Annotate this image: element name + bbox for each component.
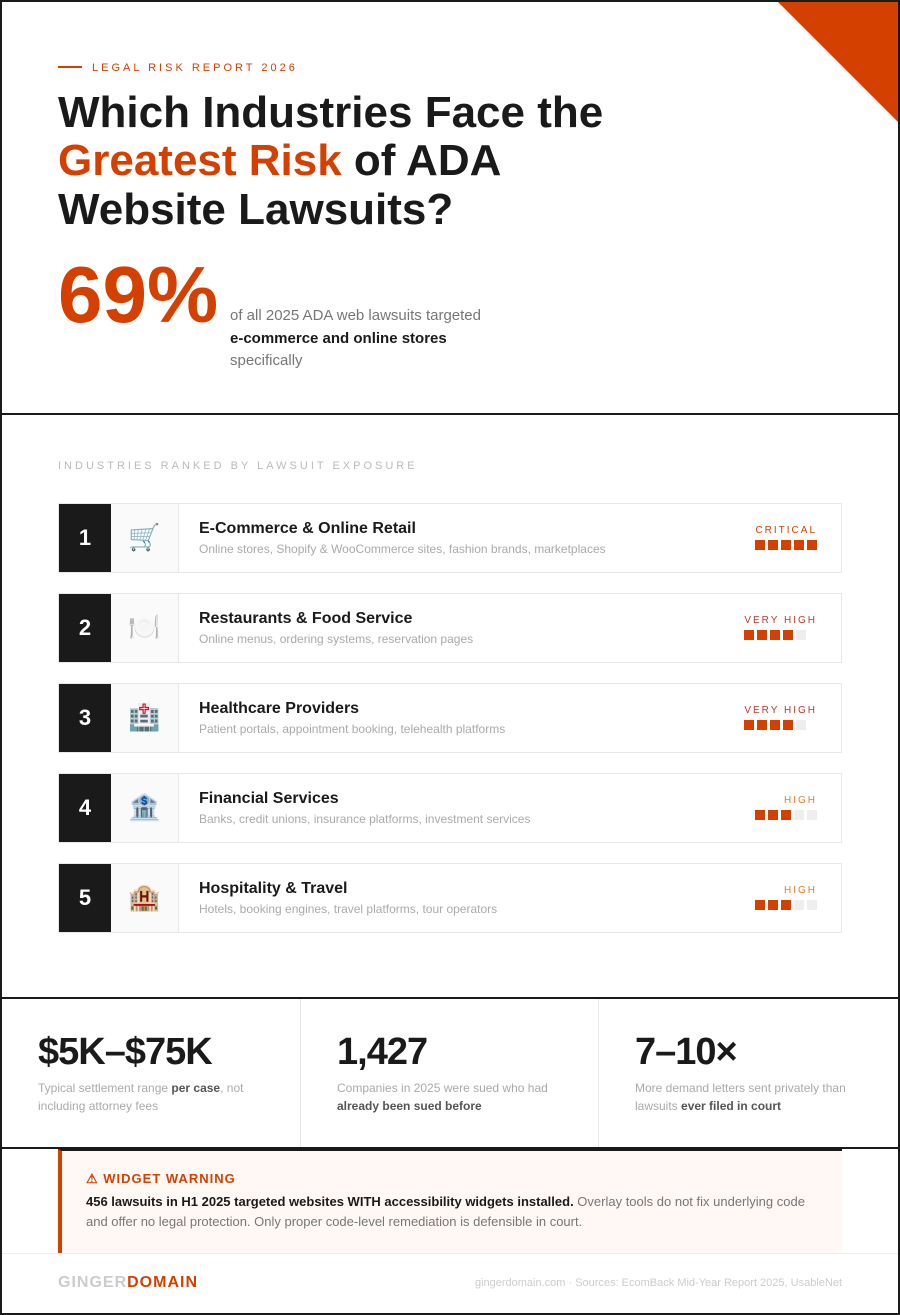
rank: [59, 774, 111, 842]
icon: hospital: 🏥: [128, 703, 161, 733]
description: Hotels, booking engines, travel platforms, tour operators: [199, 902, 497, 916]
icon: hotel: 🏨: [128, 883, 161, 913]
stat 3 text: More demand letters sent privately than: [635, 1081, 846, 1095]
row 5: [58, 863, 842, 933]
risk meter: HIGH: [784, 795, 817, 806]
stat 1 text: including attorney fees: [38, 1099, 158, 1113]
title: Website Lawsuits?: [58, 185, 453, 234]
big stat 69%: 69%: [58, 250, 218, 339]
risk meter: VERY HIGH: [744, 705, 817, 716]
row 1: [58, 503, 842, 573]
rank: [59, 504, 111, 572]
risk meter: HIGH: [784, 885, 817, 896]
risk meter: [755, 525, 817, 550]
stat description: e-commerce and online stores: [230, 330, 447, 346]
section heading: INDUSTRIES RANKED BY LAWSUIT EXPOSURE: [58, 460, 418, 472]
name: Restaurants & Food Service: [199, 610, 412, 627]
stat 3 text: lawsuits ever filed in court: [635, 1099, 781, 1113]
risk meter: [755, 885, 817, 910]
risk meter: [744, 705, 817, 730]
warning callout: [58, 1149, 842, 1253]
stat 2 value: 1,427: [337, 1031, 427, 1073]
description: Online menus, ordering systems, reservation pages: [199, 632, 473, 646]
name: Hospitality & Travel: [199, 880, 348, 897]
risk meter: CRITICAL: [755, 525, 817, 536]
rank: [59, 864, 111, 932]
stat description: [230, 307, 481, 369]
title: Which Industries Face the: [58, 88, 603, 137]
stat 3 value: 7–10×: [635, 1031, 737, 1073]
risk meter: [755, 795, 817, 820]
row 2: [58, 593, 842, 663]
warning body: [86, 1194, 805, 1229]
icon: hotel: [111, 864, 179, 932]
row 3: [58, 683, 842, 753]
icon: plate: [111, 594, 179, 662]
rank: 5: [79, 885, 91, 910]
stat 1 text: Typical settlement range per case, not: [38, 1081, 243, 1095]
stat 1 value: $5K–$75K: [38, 1031, 212, 1073]
risk meter: VERY HIGH: [744, 615, 817, 626]
warning body: and offer no legal protection. Only proper code-level remediation is defensible in court.: [86, 1214, 582, 1229]
sources: gingerdomain.com · Sources: EcomBack Mid-Year Report 2025, UsableNet: [475, 1277, 842, 1289]
rank: 3: [79, 705, 91, 730]
icon: plate: 🍽️: [128, 613, 161, 643]
title: [58, 88, 603, 234]
rank: [59, 684, 111, 752]
corner triangle: [778, 2, 898, 122]
footer: [2, 1253, 898, 1313]
description: Banks, credit unions, insurance platforms, investment services: [199, 812, 530, 826]
name: E-Commerce & Online Retail: [199, 520, 416, 537]
name: Healthcare Providers: [199, 700, 359, 717]
rank: 2: [79, 615, 91, 640]
stat 2 text: already been sued before: [337, 1099, 482, 1113]
header panel: [58, 2, 898, 369]
stat description: specifically: [230, 352, 303, 369]
stat 3 text: [635, 1081, 846, 1113]
description: Patient portals, appointment booking, telehealth platforms: [199, 722, 505, 736]
stat 2 text: Companies in 2025 were sued who had: [337, 1081, 548, 1095]
icon: bank: 🏦: [128, 793, 161, 823]
icon: hospital: [111, 684, 179, 752]
rank: 4: [79, 795, 91, 820]
row 4: [58, 773, 842, 843]
icon: cart: [111, 504, 179, 572]
warning heading: ⚠ WIDGET WARNING: [86, 1171, 236, 1186]
rank: [59, 594, 111, 662]
eyebrow: LEGAL RISK REPORT 2026: [92, 62, 298, 74]
icon: cart: 🛒: [128, 523, 161, 553]
stat 1 text: [38, 1081, 244, 1113]
name: Financial Services: [199, 790, 339, 807]
title: Greatest Risk of ADA: [58, 136, 501, 185]
stat description: of all 2025 ADA web lawsuits targeted: [230, 307, 481, 324]
stat 2 text: [337, 1081, 548, 1113]
risk meter: [744, 615, 817, 640]
icon: bank: [111, 774, 179, 842]
rank: 1: [79, 525, 91, 550]
logo: GINGERDOMAIN: [58, 1274, 198, 1291]
description: Online stores, Shopify & WooCommerce sites, fashion brands, marketplaces: [199, 542, 606, 556]
warning body: 456 lawsuits in H1 2025 targeted websites WITH accessibility widgets installed. Overlay tools do not fix underlying code: [86, 1194, 805, 1209]
stats panel: [300, 999, 599, 1147]
